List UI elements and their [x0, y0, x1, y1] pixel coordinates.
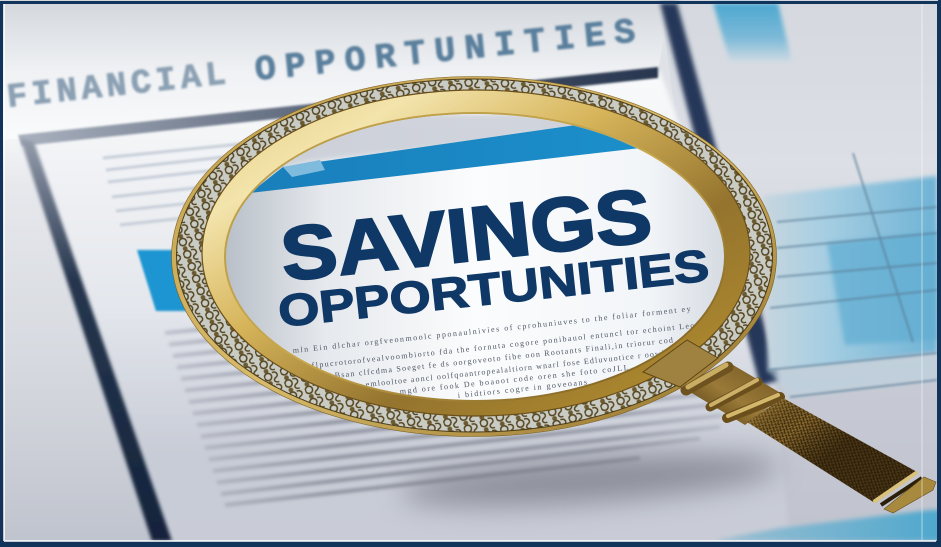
- knurled grip: [747, 398, 917, 503]
- grip shading: [747, 398, 917, 503]
- lens fine print: [292, 304, 700, 400]
- brass collar: [643, 340, 718, 387]
- deeper blue block: [827, 232, 937, 345]
- magnifying glass ring: [172, 76, 776, 436]
- document page: [24, 72, 790, 547]
- bottom right blue strip: [717, 510, 941, 541]
- left margin: [0, 138, 170, 547]
- right backdrop: [660, 0, 941, 547]
- lens fine print: flpucrotorofvealvoombiorto fda the fornuta cogore ponibauol entuncl tor echoint Leon: [311, 320, 700, 370]
- inner rim: [224, 112, 726, 402]
- heading: blurred document title: FINANCIAL: [5, 56, 228, 118]
- blue block on document: [137, 250, 195, 311]
- lens fine print: i bidtiors cogre in goveoans: [457, 377, 587, 400]
- lens fine print: mln Ein dlchar orgfveonmoolc pponaulnivies of cprohuniuves to the foliar forment ey: [292, 304, 691, 355]
- grip end cap: [884, 477, 936, 513]
- neck ring 3: [727, 395, 780, 418]
- document text lines left: [103, 142, 280, 225]
- right chart grid lines: [767, 153, 937, 397]
- magnifying glass handle: [686, 362, 936, 513]
- blue band: [252, 126, 637, 193]
- outer gold edge: [172, 76, 776, 436]
- shadow under glass: [399, 445, 781, 515]
- grip end dark groove: [881, 478, 922, 505]
- lens fine print: Bsan clfcdma Soeget fe ds oorgoveoto fibe oon Rootants Finali,in triorur cod: [334, 335, 673, 380]
- document right edge: [660, 3, 779, 386]
- right blue chart panel: [763, 176, 937, 372]
- lower right blue band: [770, 355, 937, 397]
- page header area: [0, 0, 670, 142]
- document left edge: [20, 138, 172, 541]
- lens fine print: mgd ore fook De boaoot code oren she foto coJLL: [399, 363, 629, 396]
- lens surface: [226, 114, 724, 400]
- magnified lens: [226, 114, 724, 400]
- gold rim: [202, 90, 750, 416]
- lower document lines: [165, 278, 722, 505]
- heading: blurred document title: OPPORTUNITIES: [253, 13, 637, 91]
- lens text: OPPORTUNITIES: OPPORTUNITIES: [276, 239, 712, 337]
- lens fine print: emlooltoe aoncl oolfqoantropealaltiorn wnarl fose Edluvuotice r oowl: [365, 349, 665, 389]
- lens top shadow: [286, 114, 597, 164]
- document top edge: [18, 67, 658, 146]
- top right blue panel: [713, 3, 792, 62]
- lens highlight: [283, 160, 325, 177]
- neck ring 2: [710, 380, 758, 407]
- handle neck: [690, 362, 784, 425]
- lens text: SAVINGS: SAVINGS: [277, 173, 656, 298]
- heading: blurred document title: [5, 13, 637, 118]
- grip end ring: [875, 473, 916, 501]
- filigree band: [176, 79, 772, 432]
- neck ring 1: [686, 365, 728, 390]
